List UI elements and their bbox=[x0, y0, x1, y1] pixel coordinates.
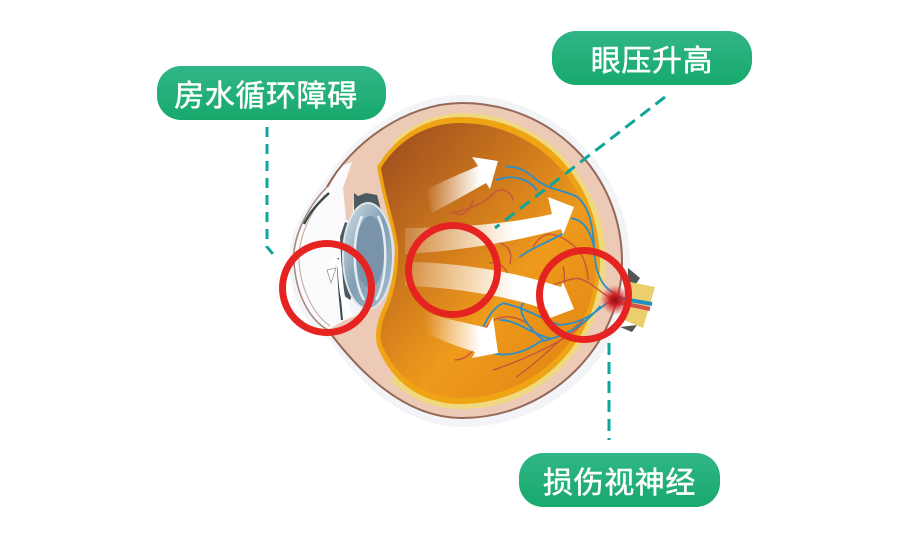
label: nerve damage: 损伤视神经 bbox=[543, 467, 696, 500]
sclera bbox=[327, 103, 622, 418]
aqueous flow arrow bbox=[327, 258, 352, 320]
label: aqueous circulation obstruction bbox=[157, 66, 386, 120]
dashed leader: left bbox=[267, 127, 273, 254]
cornea bbox=[294, 187, 350, 330]
optic disc hot spot bbox=[600, 285, 630, 315]
red circle: vitreous bbox=[408, 226, 498, 314]
label: raised eye pressure bbox=[552, 31, 752, 85]
outer halo bbox=[289, 95, 630, 427]
eyeball bbox=[289, 95, 655, 427]
dashed leader: bottom bbox=[608, 343, 610, 440]
arrow large bbox=[405, 197, 574, 254]
optic nerve bbox=[612, 268, 655, 332]
retina outer layer bbox=[392, 113, 606, 409]
dashed leader: right bbox=[495, 97, 665, 228]
arrow upper bbox=[426, 157, 498, 213]
retina inner layer bbox=[376, 117, 600, 404]
label: nerve damage bbox=[519, 453, 720, 507]
lens bbox=[343, 203, 393, 309]
vitreous body bbox=[381, 123, 596, 398]
white pressure arrows bbox=[405, 157, 574, 358]
red circle: optic nerve bbox=[540, 250, 628, 340]
arrow lower bbox=[420, 310, 498, 358]
iris dark backing bbox=[340, 193, 385, 300]
label: raised eye pressure: 眼压升高 bbox=[591, 45, 713, 78]
vessels bbox=[450, 167, 615, 377]
arrow middle bbox=[405, 262, 574, 318]
red circle: trabecular area bbox=[282, 244, 372, 332]
label: aqueous circulation obstruction: 房水循环障碍 bbox=[174, 80, 358, 113]
